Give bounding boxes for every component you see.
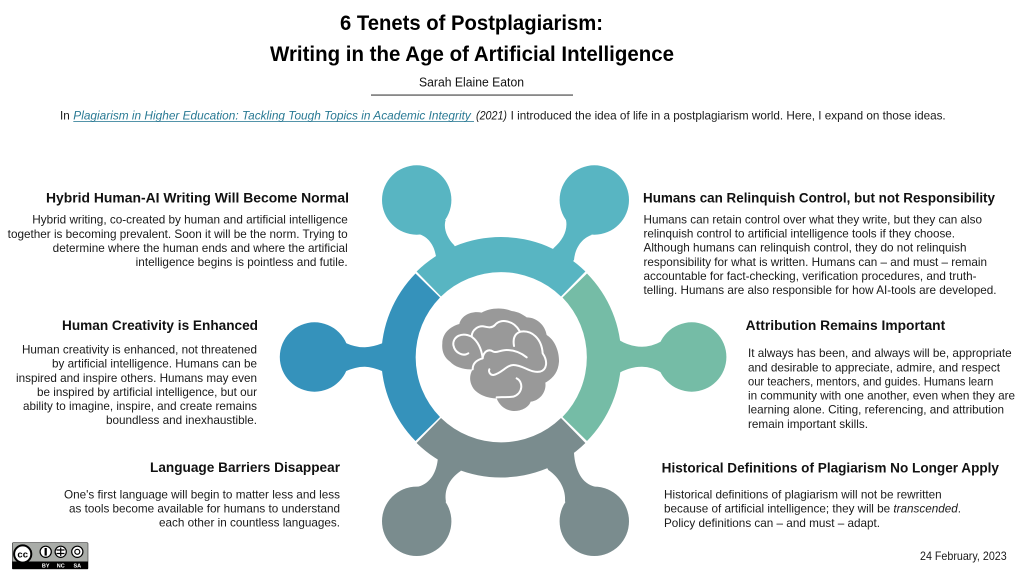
text block: our teachers, mentors, and guides. Humans learn [748, 376, 993, 389]
text block: because of artificial intelligence; they will be transcended. [664, 503, 961, 516]
text block: ability to imagine, inspire, and create remains [23, 400, 257, 413]
panel: relinquish control [643, 191, 996, 297]
text block: be inspired by artificial intelligence, but our [37, 386, 257, 399]
intro text [60, 110, 946, 122]
text block [748, 347, 1015, 431]
segment: right green [562, 274, 726, 441]
date: 24 February, 2023 [920, 550, 1007, 563]
heading: Human Creativity is Enhanced [62, 318, 258, 333]
text block: Hybrid writing, co-created by human and artificial intelligence [32, 214, 348, 227]
intro text: (2021) [476, 110, 507, 122]
heading: Humans can Relinquish Control, but not Responsibility [643, 191, 995, 206]
intro text: In [60, 110, 70, 122]
icon: creative commons badge: NC [57, 564, 65, 570]
heading: Historical Definitions of Plagiarism No Longer Apply [662, 460, 999, 475]
heading: Attribution Remains Important [746, 318, 946, 333]
panel: human creativity [16, 318, 258, 427]
text block: boundless and inexhaustible. [106, 414, 257, 427]
segment: left blue [280, 274, 440, 441]
text block: One's first language will begin to matter less and less [64, 489, 340, 502]
text block: Although humans can relinquish control, they do not relinquish [644, 242, 966, 255]
intro text: Plagiarism in Higher Education: Tackling Tough Topics in Academic Integrity [73, 110, 472, 122]
title: 6 Tenets of Postplagiarism: [340, 11, 603, 35]
text block: Humans can retain control over what they write, but they can also [644, 214, 982, 227]
hub diagram [280, 165, 726, 556]
text block: It always has been, and always will be, appropriate [748, 347, 1012, 360]
heading: Hybrid Human-AI Writing Will Become Normal [46, 190, 349, 206]
panel: language barriers [64, 460, 341, 530]
icon: creative commons badge: SA [73, 564, 81, 570]
text block: remain important skills. [748, 418, 868, 431]
title: Writing in the Age of Artificial Intelligence [270, 42, 674, 66]
text block: intelligence begins is pointless and futile. [136, 256, 348, 269]
panel: attribution [746, 318, 1015, 431]
author: Sarah Elaine Eaton [419, 74, 524, 90]
text block [8, 214, 348, 269]
text block: in community with one another, even when they are [748, 390, 1015, 403]
text block: learning alone. Citing, referencing, and attribution [748, 404, 1004, 417]
icon: creative commons badge [12, 543, 88, 570]
text block [644, 214, 996, 297]
text block: responsibility for what is written. Humans can – and must – remain [644, 256, 987, 269]
text block: Historical definitions of plagiarism will not be rewritten [664, 489, 942, 502]
heading: Language Barriers Disappear [150, 460, 341, 475]
text block: inspired and inspire others. Humans may even [16, 372, 257, 385]
text block: relinquish control to artificial intelligence tools if they choose. [644, 228, 955, 241]
text block [664, 489, 961, 530]
panel: historical definitions [662, 460, 999, 530]
text block: Human creativity is enhanced, not threatened [22, 344, 257, 357]
text block: and desirable to appreciate, admire, and respect [748, 361, 1001, 374]
panel: hybrid writing [8, 190, 349, 269]
text block: as tools become available for humans to understand [69, 503, 340, 516]
title [270, 11, 674, 66]
icon: brain [442, 308, 559, 411]
text block: determine where the human ends and where the artificial [53, 242, 348, 255]
text block [16, 344, 257, 427]
text block: accountable for fact-checking, verification procedures, and truth- [644, 270, 977, 283]
text block: telling. Humans are also responsible for how AI-tools are developed. [644, 284, 996, 297]
text block: together is becoming prevalent. Soon it will be the norm. Trying to [8, 228, 348, 241]
icon: creative commons badge: BY [42, 564, 50, 570]
intro text: I introduced the idea of life in a postplagiarism world. Here, I expand on those ideas. [511, 110, 946, 122]
icon: creative commons badge: cc [17, 549, 28, 560]
text block: Policy definitions can – and must – adapt. [664, 517, 880, 530]
text block [64, 489, 340, 530]
segment: bottom grey [382, 418, 629, 556]
text block: by artificial intelligence. Humans can be [52, 358, 257, 371]
segment: top teal [382, 165, 629, 296]
text block: each other in countless languages. [159, 517, 340, 530]
